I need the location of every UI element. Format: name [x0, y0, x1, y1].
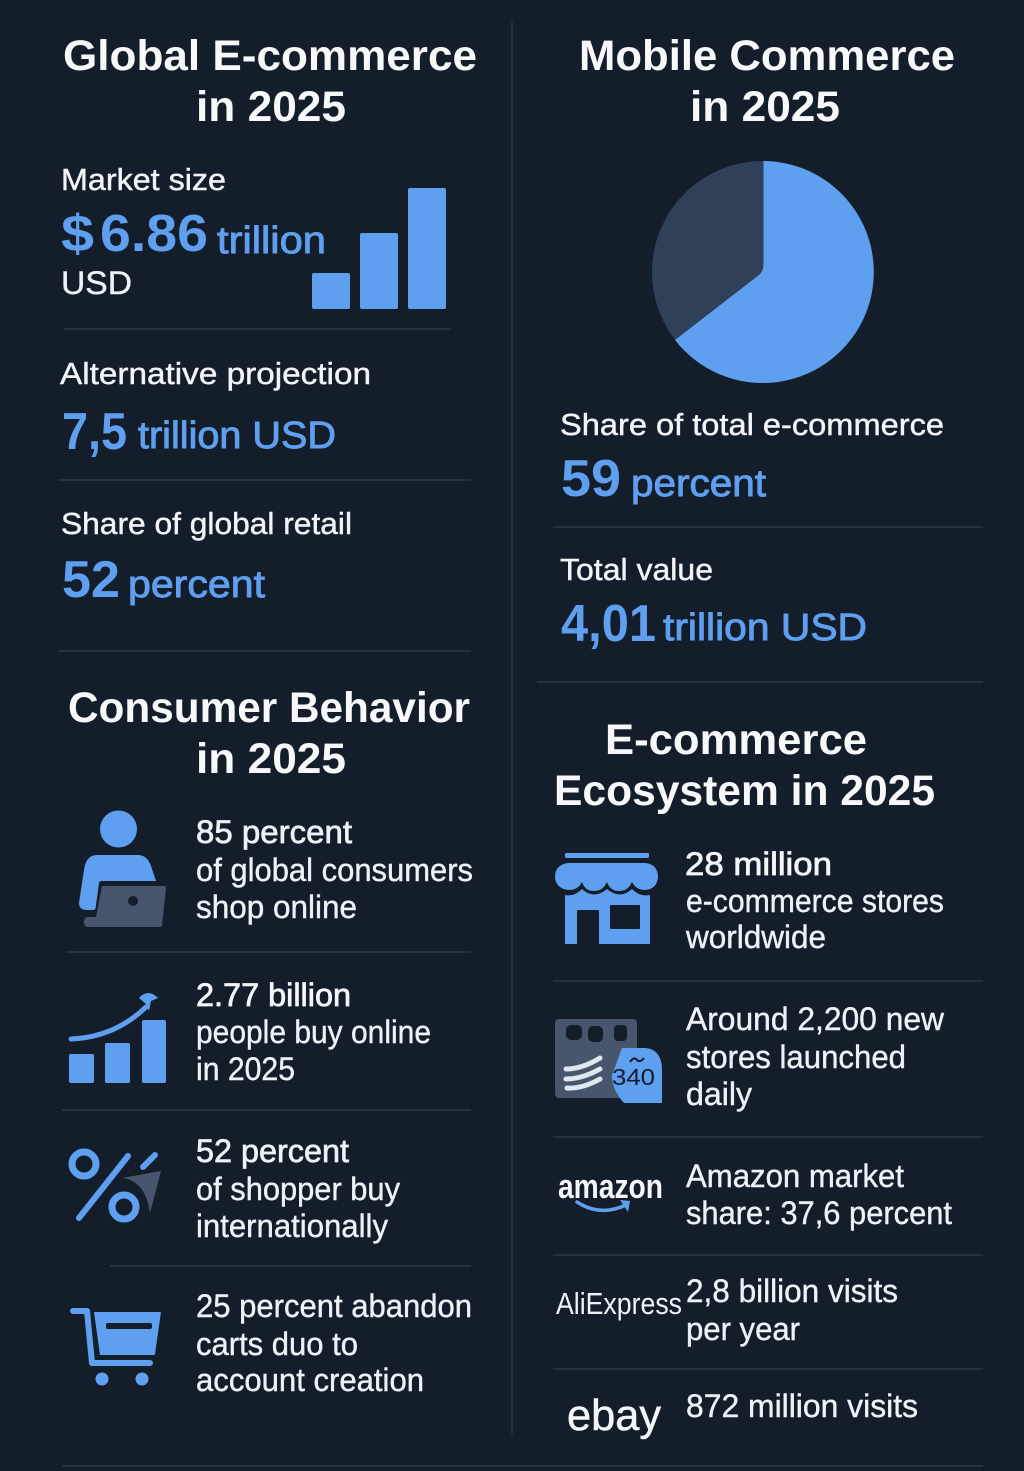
item: AliExpress visits: 2,8 billion visits — [686, 1273, 898, 1309]
panel: market size: 6.86 — [100, 205, 208, 263]
item: AliExpress visits: per year — [686, 1311, 800, 1347]
icon: person with laptop — [79, 810, 166, 927]
item: 2.77 billion people: people buy online — [196, 1014, 431, 1050]
item: 2,200 new stores: daily — [686, 1076, 752, 1112]
item: Amazon market share: share: 37,6 percent — [686, 1195, 952, 1231]
heading: Global E-commerce in 2025: Global E-commerce — [63, 32, 477, 80]
item: 28 million stores: worldwide — [685, 919, 826, 955]
heading: Consumer Behavior in 2025: Consumer Behavior — [68, 684, 470, 732]
item: 2,200 new stores — [555, 1001, 945, 1112]
icon: store panel with 340 badge: 340 — [612, 1064, 655, 1090]
heading: Mobile Commerce in 2025: in 2025 — [690, 83, 840, 131]
item: Amazon market share: Amazon market — [686, 1158, 904, 1194]
panel: market size: USD — [61, 265, 132, 301]
panel: total value: 4,01 — [561, 595, 656, 653]
panel: alternative projection: Alternative projection — [60, 356, 371, 391]
item: 2.77 billion people: in 2025 — [196, 1051, 295, 1087]
logo: amazon: amazon — [558, 1168, 663, 1206]
logo: ebay: ebay — [567, 1391, 661, 1440]
item: 85 percent shop online — [79, 810, 473, 927]
item: 28 million stores — [555, 846, 944, 955]
icon: bar chart — [312, 188, 446, 309]
item: 85 percent shop online: 85 percent — [196, 814, 352, 850]
item: 52 percent shop internationally: 52 percent — [196, 1133, 349, 1169]
item: 52 percent shop internationally — [72, 1133, 400, 1244]
heading: E-commerce Ecosystem in 2025 — [554, 716, 935, 815]
item: 25 percent abandon carts: account creation — [196, 1362, 424, 1398]
icon: storefront — [555, 853, 658, 944]
item: eBay visits — [567, 1388, 918, 1440]
heading: Consumer Behavior in 2025 — [68, 684, 470, 783]
logo: AliExpress: AliExpress — [556, 1286, 682, 1321]
panel: alternative projection: 7,5 — [62, 403, 127, 461]
heading: Global E-commerce in 2025: in 2025 — [196, 83, 346, 131]
icon: shopping cart — [73, 1311, 161, 1386]
item: 52 percent shop internationally: internationally — [196, 1208, 388, 1244]
heading: Mobile Commerce in 2025: Mobile Commerce — [579, 32, 955, 80]
icon: rising bars with arrow — [69, 993, 166, 1083]
panel: total value: trillion USD — [663, 607, 867, 649]
item: 85 percent shop online: shop online — [196, 889, 357, 925]
panel: alternative projection — [60, 356, 371, 461]
item: 2.77 billion people: 2.77 billion — [196, 977, 351, 1013]
panel: total value: Total value — [560, 552, 713, 587]
icon: percent sign with tag — [72, 1152, 161, 1219]
item: 85 percent shop online: of global consumers — [196, 852, 473, 888]
heading: Global E-commerce in 2025 — [63, 32, 477, 131]
panel: market size — [61, 162, 446, 309]
item: eBay visits: 872 million visits — [686, 1388, 918, 1424]
item: 25 percent abandon carts: 25 percent abandon — [196, 1288, 472, 1324]
pie chart: 59 percent mobile share — [652, 161, 874, 383]
item: 25 percent abandon carts — [73, 1288, 472, 1398]
heading: Mobile Commerce in 2025 — [579, 32, 955, 131]
panel: market size: trillion — [217, 220, 326, 262]
heading: E-commerce Ecosystem in 2025: Ecosystem in 2025 — [554, 767, 935, 815]
panel: total value — [560, 552, 867, 653]
panel: share of total e-commerce: 59 — [561, 450, 621, 508]
item: 28 million stores: 28 million — [685, 846, 832, 882]
item: 25 percent abandon carts: carts duo to — [196, 1326, 358, 1362]
panel: share of total e-commerce: percent — [631, 463, 766, 505]
panel: share of global retail: percent — [128, 564, 265, 606]
item: 2.77 billion people — [69, 977, 431, 1087]
item: 2,200 new stores: Around 2,200 new — [686, 1001, 945, 1037]
panel: share of total e-commerce — [560, 407, 944, 508]
heading: Consumer Behavior in 2025: in 2025 — [196, 735, 346, 783]
item: Amazon market share — [558, 1158, 952, 1231]
item: 28 million stores: e-commerce stores — [686, 883, 944, 919]
panel: share of total e-commerce: Share of total e-commerce — [560, 407, 944, 442]
panel: market size: $ — [61, 205, 94, 263]
panel: share of global retail — [61, 506, 352, 609]
panel: market size: Market size — [61, 162, 226, 197]
panel: share of global retail: Share of global retail — [61, 506, 352, 541]
icon: store panel with 340 badge — [555, 1019, 662, 1103]
panel: share of global retail: 52 — [62, 551, 120, 609]
heading: E-commerce Ecosystem in 2025: E-commerce — [605, 716, 867, 764]
item: 52 percent shop internationally: of shopper buy — [196, 1171, 400, 1207]
panel: alternative projection: trillion USD — [138, 415, 336, 457]
item: 2,200 new stores: stores launched — [686, 1039, 906, 1075]
item: AliExpress visits — [556, 1273, 898, 1347]
